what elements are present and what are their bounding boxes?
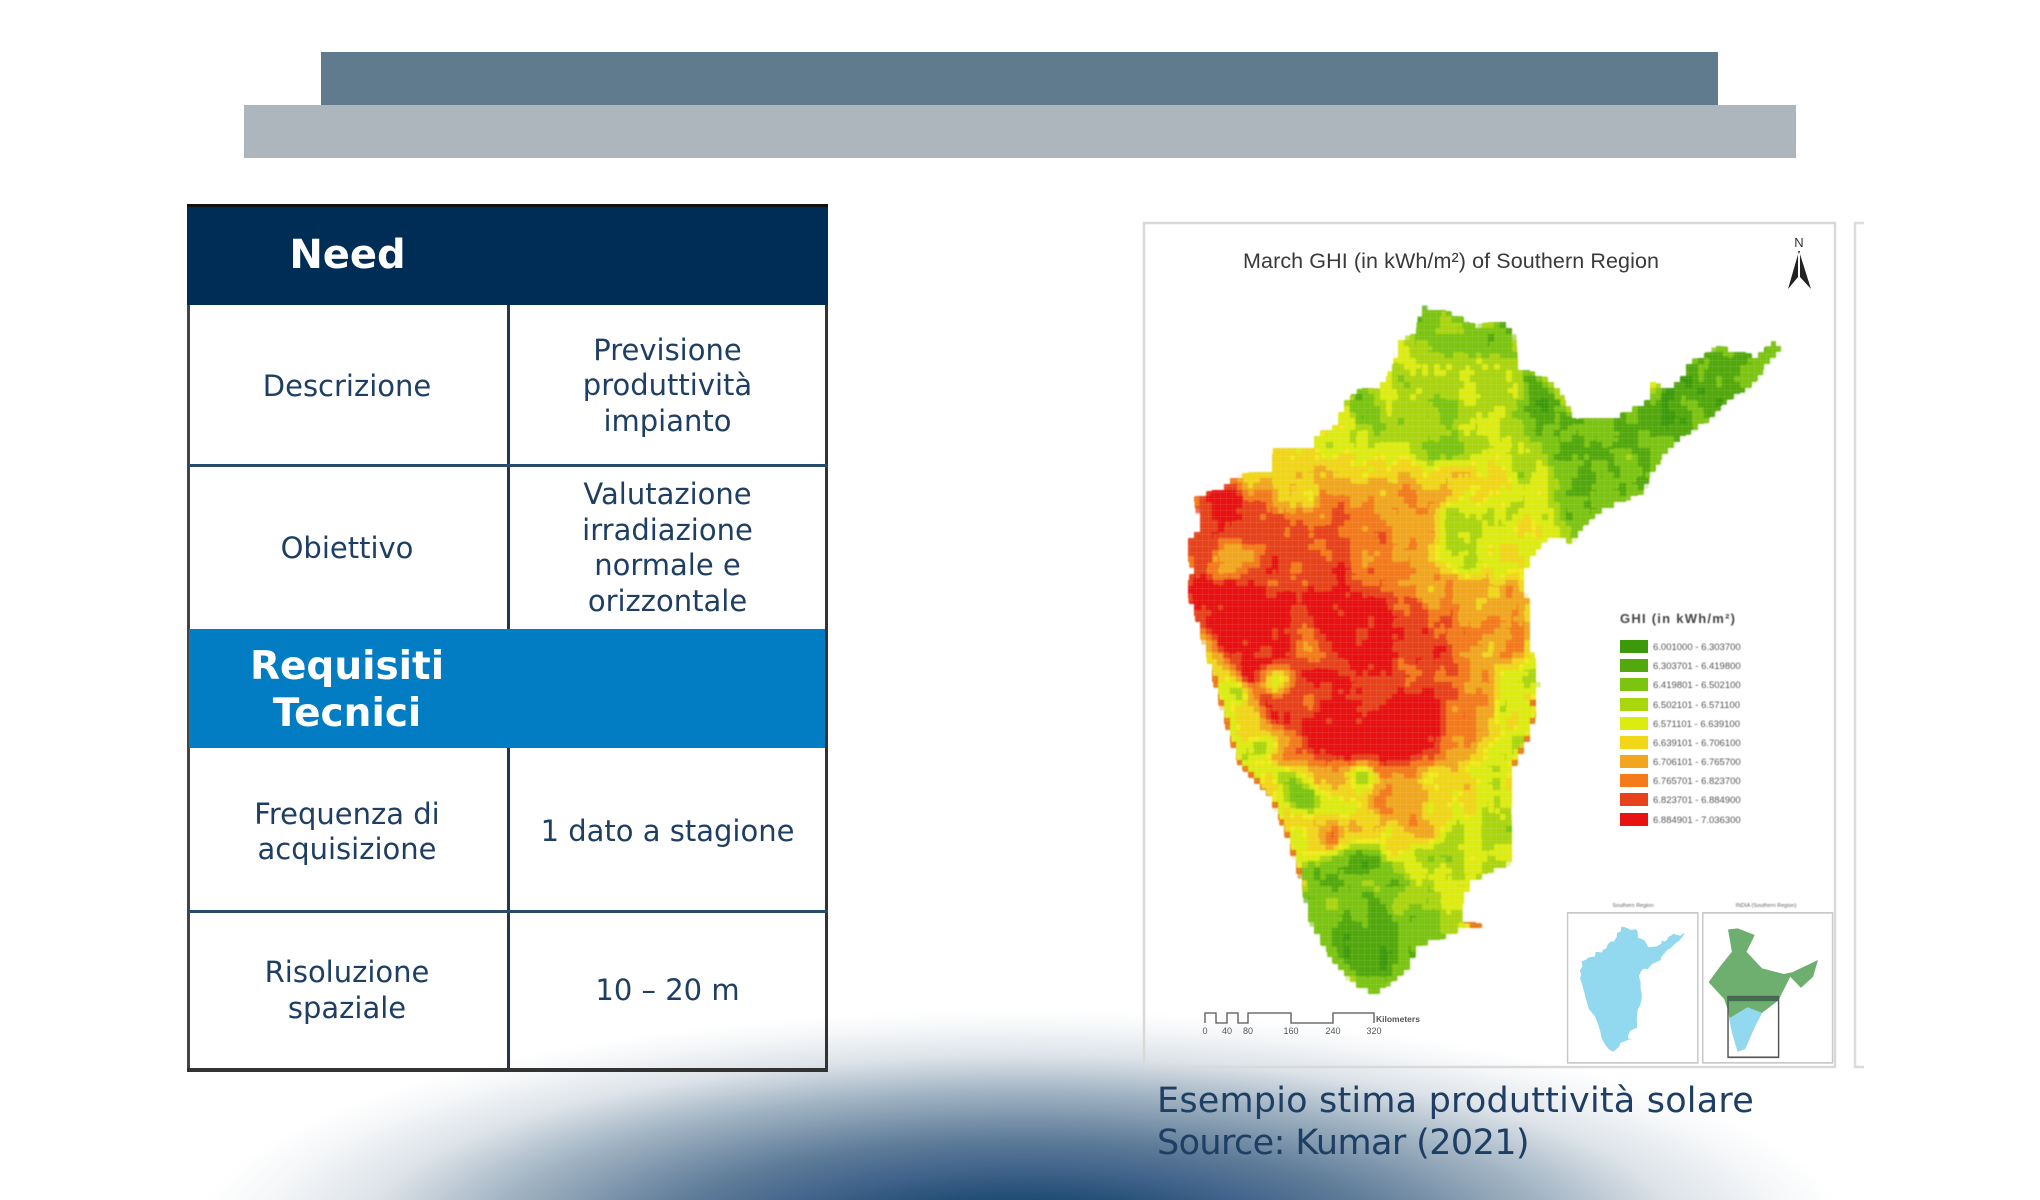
- north arrow: [1788, 235, 1811, 289]
- legend: 6.639101 - 6.706100: [1653, 738, 1741, 749]
- technical requirements heading: Tecnici: [273, 690, 421, 736]
- technical requirements band: [189, 629, 825, 748]
- cell: obiettivo value: normale e: [594, 548, 741, 582]
- title bar: dark: [321, 52, 1718, 105]
- inset captions: INDIA (Southern Region): [1736, 903, 1797, 909]
- legend: 6.303701 - 6.419800: [1653, 661, 1741, 672]
- cell: frequenza label: acquisizione: [258, 832, 436, 866]
- caption: Esempio stima produttività solare: [1157, 1081, 1754, 1121]
- cell: descrizione value: [583, 333, 752, 438]
- inset captions: Southern Region: [1612, 903, 1654, 909]
- neighbouring frame sliver: [1855, 223, 1864, 1067]
- legend: 6.571101 - 6.639100: [1653, 719, 1740, 730]
- GHI choropleth map: [1179, 299, 1786, 1005]
- left border: [187, 305, 190, 1072]
- inset: southern region: [1568, 913, 1698, 1063]
- caption: Source: Kumar (2021): [1157, 1123, 1529, 1163]
- cell: descrizione value: produttività: [583, 368, 752, 402]
- map title: March GHI (in kWh/m²) of Southern Region: [1243, 249, 1659, 273]
- scale bar: 40: [1222, 1026, 1232, 1036]
- cell: obiettivo label: Obiettivo: [281, 531, 413, 565]
- legend: 6.419801 - 6.502100: [1653, 680, 1741, 691]
- map figure: [1142, 222, 1864, 1068]
- title bar: light: [244, 105, 1796, 158]
- legend: 6.001000 - 6.303700: [1653, 642, 1741, 653]
- scale bar: Kilometers: [1376, 1014, 1420, 1024]
- need header: [187, 204, 828, 305]
- cell: descrizione label: Descrizione: [263, 369, 431, 403]
- cell: descrizione value: impianto: [603, 404, 732, 438]
- north arrow: N: [1794, 235, 1804, 250]
- cell: risoluzione label: [265, 955, 429, 1024]
- scale bar: 240: [1325, 1026, 1341, 1036]
- row divider 1: [187, 464, 828, 467]
- cell: obiettivo value: [582, 477, 753, 618]
- cell: risoluzione label: spaziale: [288, 990, 406, 1024]
- cell: obiettivo value: orizzontale: [588, 584, 747, 618]
- table panel: need and technical requirements: [187, 204, 828, 1072]
- cell: risoluzione label: Risoluzione: [265, 955, 429, 989]
- cell: frequenza label: Frequenza di: [254, 796, 440, 830]
- right border: [825, 305, 828, 1072]
- legend: [1620, 611, 1741, 826]
- cell: obiettivo value: irradiazione: [582, 512, 753, 546]
- scale bar: 320: [1366, 1026, 1382, 1036]
- bottom radial glow: [0, 960, 2040, 1200]
- scale bar: 0: [1202, 1026, 1208, 1036]
- legend: 6.502101 - 6.571100: [1653, 700, 1740, 711]
- cell: frequenza label: [254, 796, 440, 866]
- technical requirements heading: [250, 644, 444, 736]
- inset: india locator: [1703, 913, 1833, 1063]
- column divider: [507, 305, 510, 1072]
- legend: 6.706101 - 6.765700: [1653, 757, 1741, 768]
- cell: risoluzione value: 10 – 20 m: [595, 973, 740, 1007]
- cell: descrizione value: Previsione: [593, 333, 742, 367]
- legend: 6.823701 - 6.884900: [1653, 795, 1741, 806]
- legend: GHI (in kWh/m²): [1620, 611, 1735, 626]
- legend: 6.765701 - 6.823700: [1653, 776, 1741, 787]
- cell: obiettivo value: Valutazione: [583, 477, 752, 511]
- legend: 6.884901 - 7.036300: [1653, 815, 1741, 826]
- scale bar: 160: [1283, 1026, 1299, 1036]
- map frame: [1144, 223, 1835, 1067]
- scale bar: [1202, 1013, 1420, 1036]
- table bottom border: [187, 1068, 828, 1072]
- caption: [1157, 1081, 1754, 1163]
- row divider 2: [187, 910, 828, 913]
- need heading: Need: [289, 232, 406, 278]
- cell: frequenza value: 1 dato a stagione: [541, 814, 794, 848]
- scale bar: 80: [1243, 1026, 1253, 1036]
- inset captions: [1612, 903, 1797, 909]
- technical requirements heading: Requisiti: [250, 644, 444, 688]
